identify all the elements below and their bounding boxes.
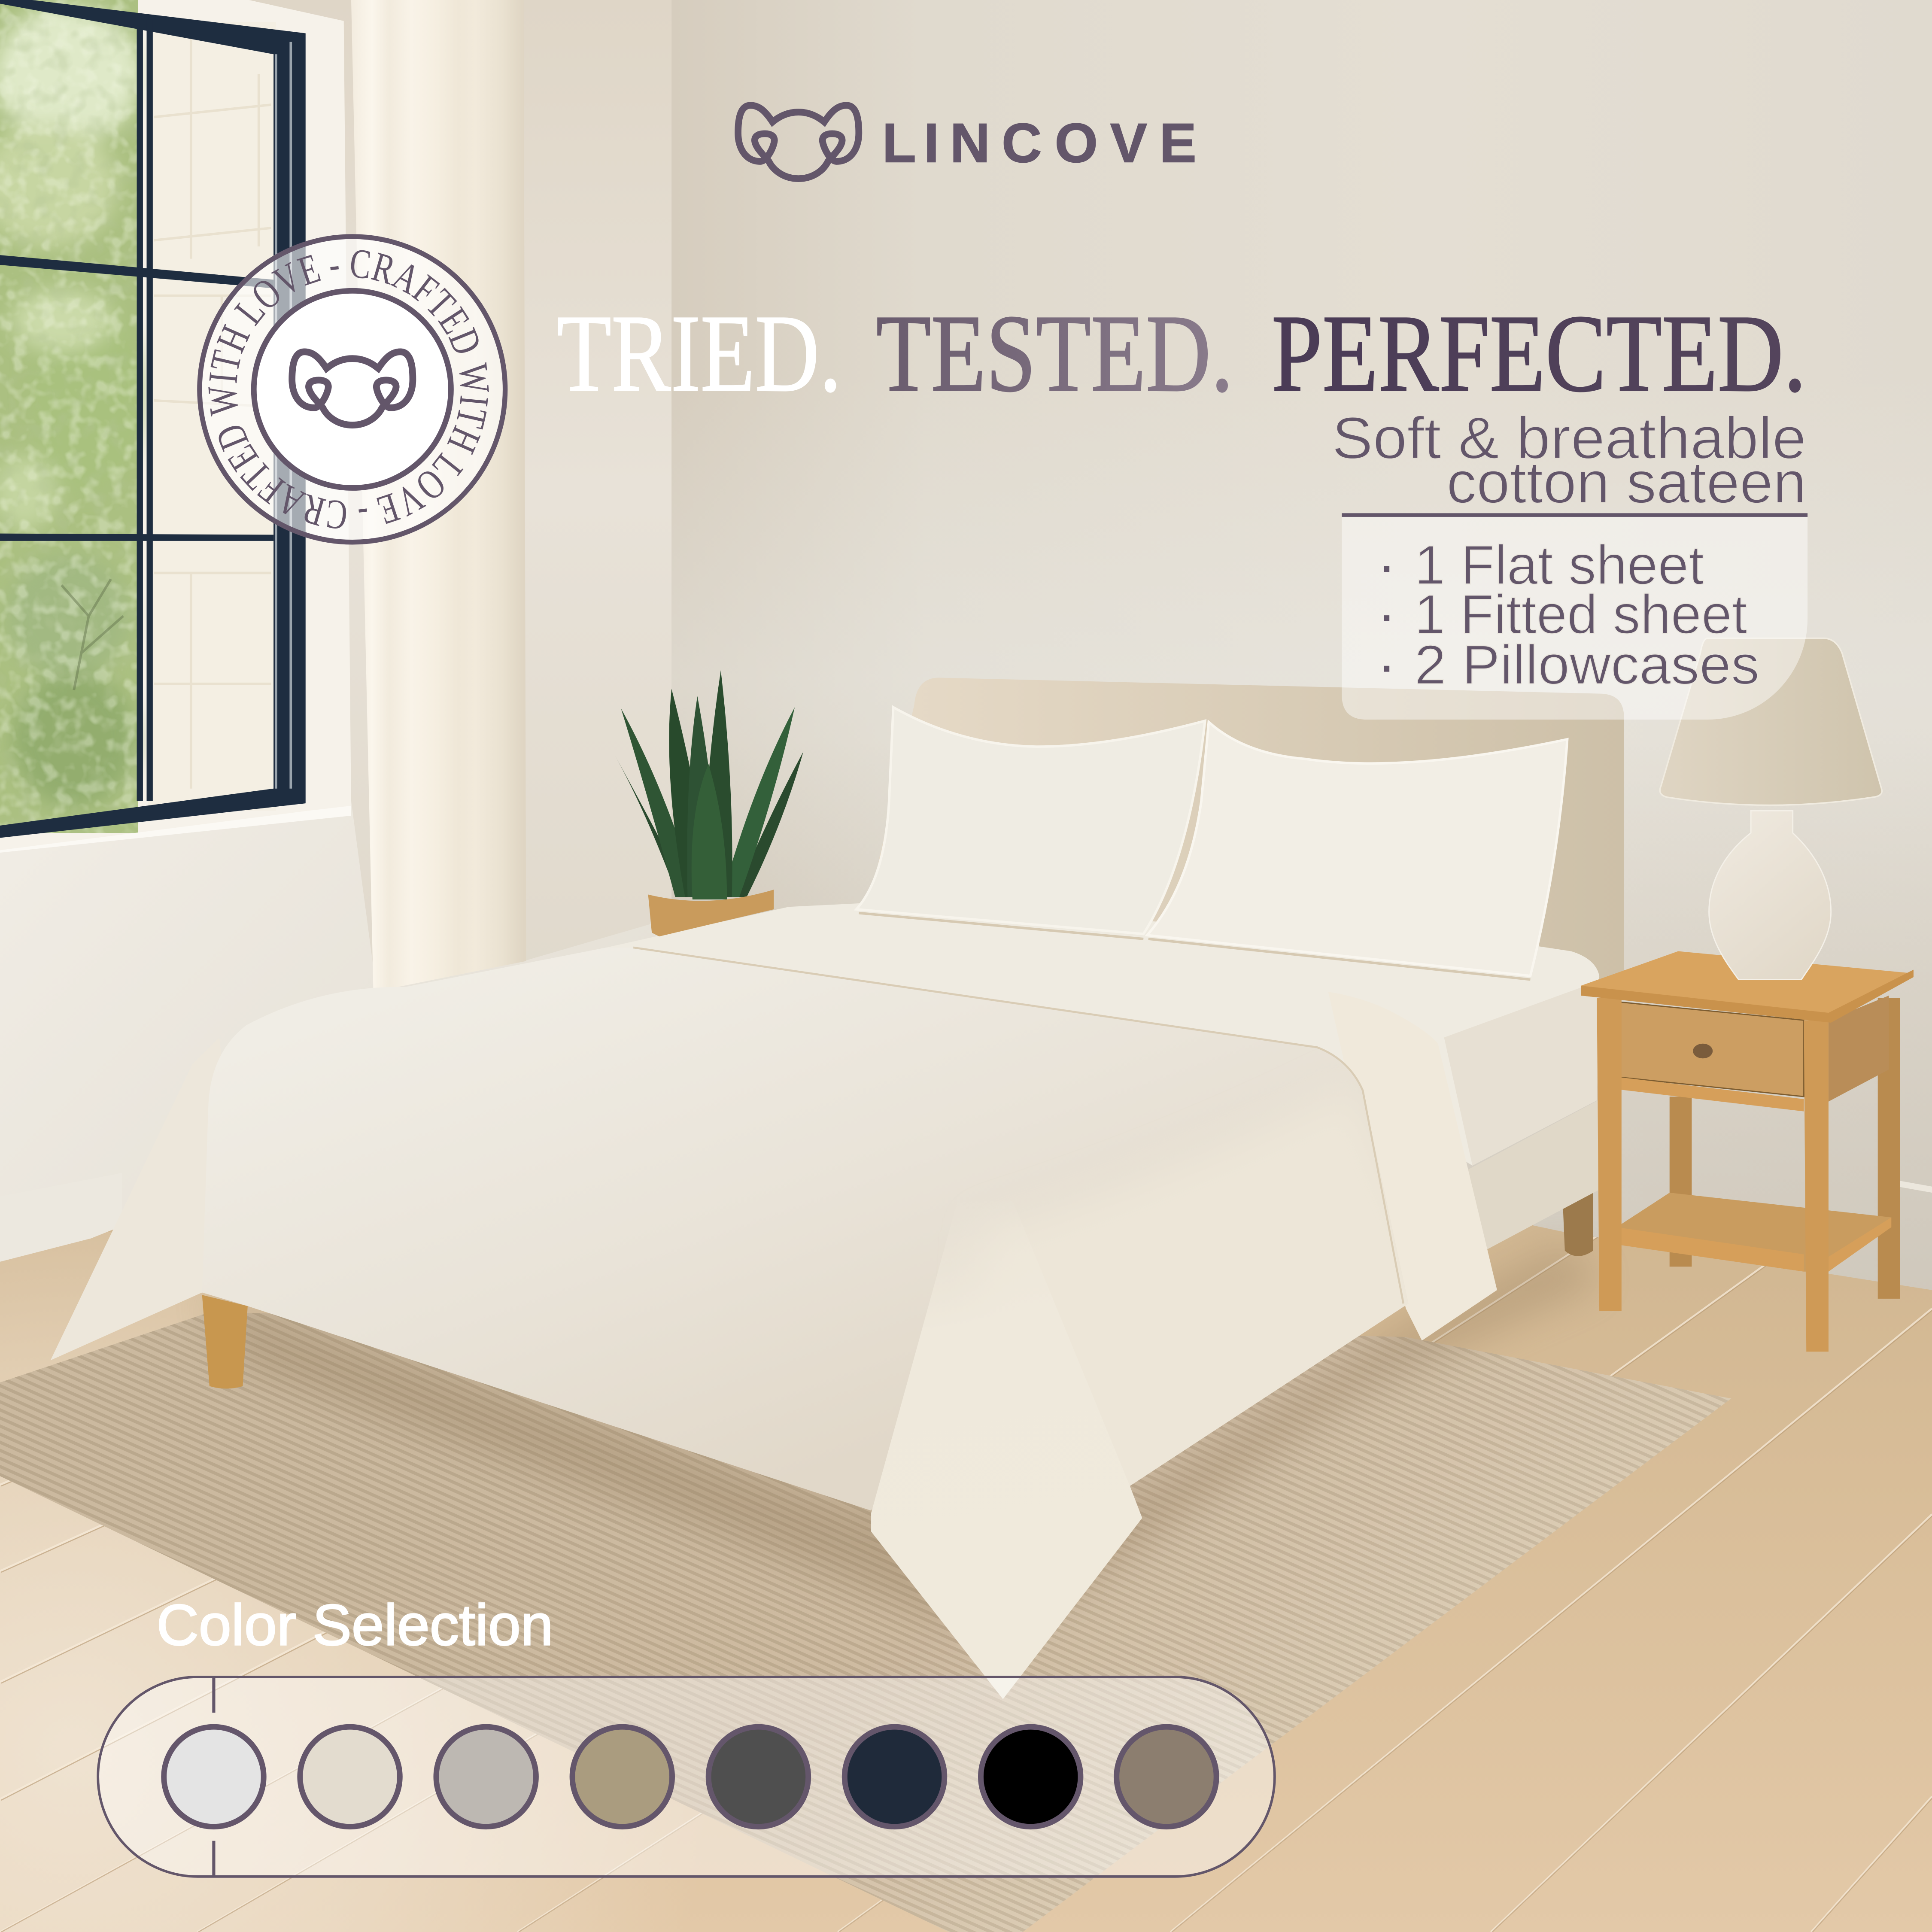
flat sheet front corner drape <box>871 1201 1142 1699</box>
front legs <box>1597 998 1829 1352</box>
foliage panes <box>0 0 142 833</box>
bed leg right <box>1562 1193 1593 1256</box>
pot <box>648 890 774 936</box>
knob <box>1693 1044 1713 1058</box>
subtitle: Soft & breathable <box>1332 405 1806 471</box>
stone wall panes <box>148 22 276 811</box>
lamp <box>1660 638 1882 980</box>
flat sheet right face <box>1031 1130 1408 1486</box>
seal ring <box>200 237 505 542</box>
fitted sheet side <box>1444 981 1599 1166</box>
drawer side <box>1829 996 1889 1102</box>
swatches <box>164 1727 1216 1827</box>
window frame highlights <box>276 42 291 789</box>
panel list: · <box>1378 534 1396 596</box>
headline word tried: TRIED. <box>557 292 841 415</box>
selector pill <box>98 1677 1275 1877</box>
flat sheet right drape <box>1328 992 1497 1340</box>
window casing <box>0 0 351 850</box>
seal mark <box>292 352 413 425</box>
shelf <box>1616 1193 1891 1272</box>
bed shadow <box>204 1245 1602 1639</box>
headline <box>557 292 1806 415</box>
logo wordmark: LINCOVE <box>882 112 1197 174</box>
window <box>0 0 351 853</box>
contents panel <box>1342 513 1807 720</box>
flat sheet fold line <box>633 948 1403 1303</box>
bed base <box>1466 1100 1598 1251</box>
seal circular text: CRAFTED WITH LOVE - CRAFTED WITH LOVE - <box>199 240 498 539</box>
lamp base <box>1709 811 1831 980</box>
flat sheet left drape <box>51 1037 234 1360</box>
panel background <box>1342 516 1807 720</box>
pillow seams <box>859 913 1530 980</box>
rug <box>0 1312 1731 1932</box>
back legs <box>1670 998 1900 1299</box>
seal centre <box>254 291 451 488</box>
pillow left <box>857 707 1205 934</box>
logo mark <box>738 105 859 179</box>
table top <box>1581 951 1914 1020</box>
bed leg left <box>202 1295 248 1388</box>
color selector <box>98 1677 1275 1877</box>
panel list: 1 Flat sheet <box>1415 534 1704 596</box>
flat sheet main <box>202 948 1408 1510</box>
seal badge <box>199 237 505 542</box>
panel rule <box>1342 513 1807 517</box>
panel list: · <box>1378 634 1396 696</box>
color selection heading: Color Selection <box>156 1592 553 1657</box>
pillow right <box>1147 722 1567 976</box>
bed <box>51 677 1624 1699</box>
panel list: 1 Fitted sheet <box>1415 583 1747 645</box>
headboard <box>850 677 1624 986</box>
floor <box>0 662 1932 1932</box>
lamp shade <box>1660 638 1882 805</box>
logo <box>738 105 1197 179</box>
window frame <box>0 0 306 838</box>
right wall <box>671 0 1932 1290</box>
left wall <box>0 0 671 1262</box>
headline word perfected: PERFECTED. <box>1272 292 1806 415</box>
panel list: 2 Pillowcases <box>1415 634 1759 696</box>
plant <box>615 670 803 936</box>
subtitle: cotton sateen <box>1446 450 1806 516</box>
leaves <box>615 670 803 899</box>
fitted sheet <box>606 903 1599 1166</box>
headline word tested: TESTED. <box>876 292 1233 415</box>
rail <box>1616 1077 1804 1112</box>
curtain <box>351 0 526 992</box>
drawer <box>1616 1002 1804 1097</box>
selection tick marks <box>213 1677 214 1877</box>
panel list <box>1378 534 1759 696</box>
subtitle <box>1332 405 1806 516</box>
nightstand <box>1581 951 1914 1352</box>
panel list: · <box>1378 583 1396 645</box>
